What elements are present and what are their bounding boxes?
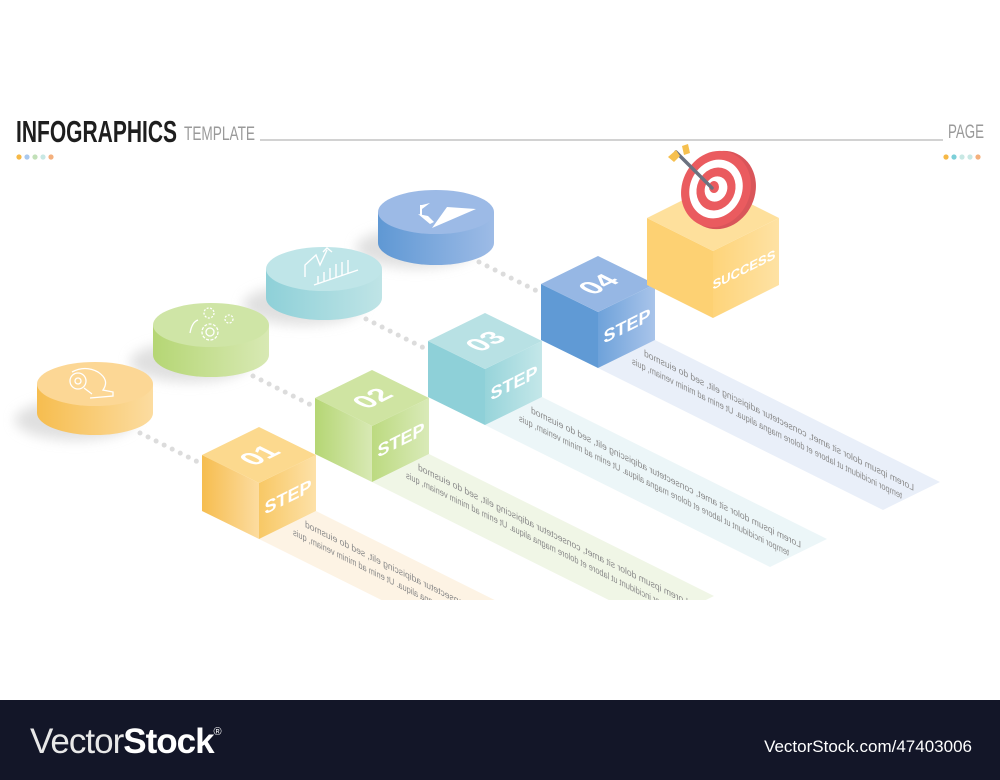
- text strips: Lorem ipsum dolor sit amet, consectetur adipiscing elit, sed do eiusmod: [644, 348, 914, 494]
- cube 03: STEP: [491, 362, 538, 405]
- icon: growth chart: [305, 248, 358, 285]
- cube 03: [428, 313, 542, 425]
- text strips: tempor incididunt ut labore et dolore magna aliqua. Ut enim ad minim veniam, quis: [406, 470, 676, 616]
- title: PAGE: [948, 122, 984, 143]
- cube 02: STEP: [378, 419, 425, 462]
- text strips: Lorem ipsum dolor sit amet, consectetur adipiscing elit, sed do eiusmod: [418, 462, 688, 608]
- title: [16, 114, 984, 160]
- cylinder 4: mountain flag: [378, 190, 494, 265]
- icon: summit: [418, 203, 476, 228]
- cube 02: 02: [344, 384, 400, 412]
- cube 04: [541, 256, 655, 368]
- footer: VectorStock: [30, 722, 214, 761]
- success cube: [647, 185, 779, 318]
- footer: [0, 700, 1000, 780]
- cylinder 1: idea: [37, 362, 153, 435]
- text strips: tempor incididunt ut labore et dolore magna aliqua. Ut enim ad minim veniam, quis: [519, 413, 789, 559]
- cube 04: STEP: [604, 305, 651, 348]
- text strips: tempor incididunt ut labore et dolore magna aliqua. Ut enim ad minim veniam, quis: [632, 356, 902, 502]
- icon: bulb head: [70, 368, 113, 398]
- cube 01: [202, 427, 316, 539]
- icon: gears: [190, 308, 233, 340]
- cylinder 2: gears: [153, 303, 269, 377]
- cube 01: 01: [231, 441, 287, 469]
- cylinder 3: chart: [266, 247, 382, 320]
- text strips: tempor incididunt ut labore et dolore magna aliqua. Ut enim ad minim veniam, quis: [293, 527, 563, 673]
- cube 01: STEP: [265, 476, 312, 519]
- footer: ®: [214, 726, 222, 738]
- title: TEMPLATE: [184, 124, 255, 145]
- text strips: [260, 340, 940, 600]
- icon: target with arrow: [668, 139, 769, 241]
- text strips: Lorem ipsum dolor sit amet, consectetur adipiscing elit, sed do eiusmod: [305, 519, 575, 665]
- cube 03: 03: [457, 327, 513, 355]
- cube 02: [315, 370, 429, 482]
- cube 04: 04: [570, 270, 627, 298]
- dotted connectors: [140, 262, 537, 462]
- success cube: SUCCESS: [713, 247, 775, 293]
- title: INFOGRAPHICS: [16, 114, 177, 149]
- text strips: Lorem ipsum dolor sit amet, consectetur adipiscing elit, sed do eiusmod: [531, 405, 801, 551]
- footer: VectorStock.com/47403006: [764, 737, 972, 756]
- cylinder shadows: [15, 228, 476, 440]
